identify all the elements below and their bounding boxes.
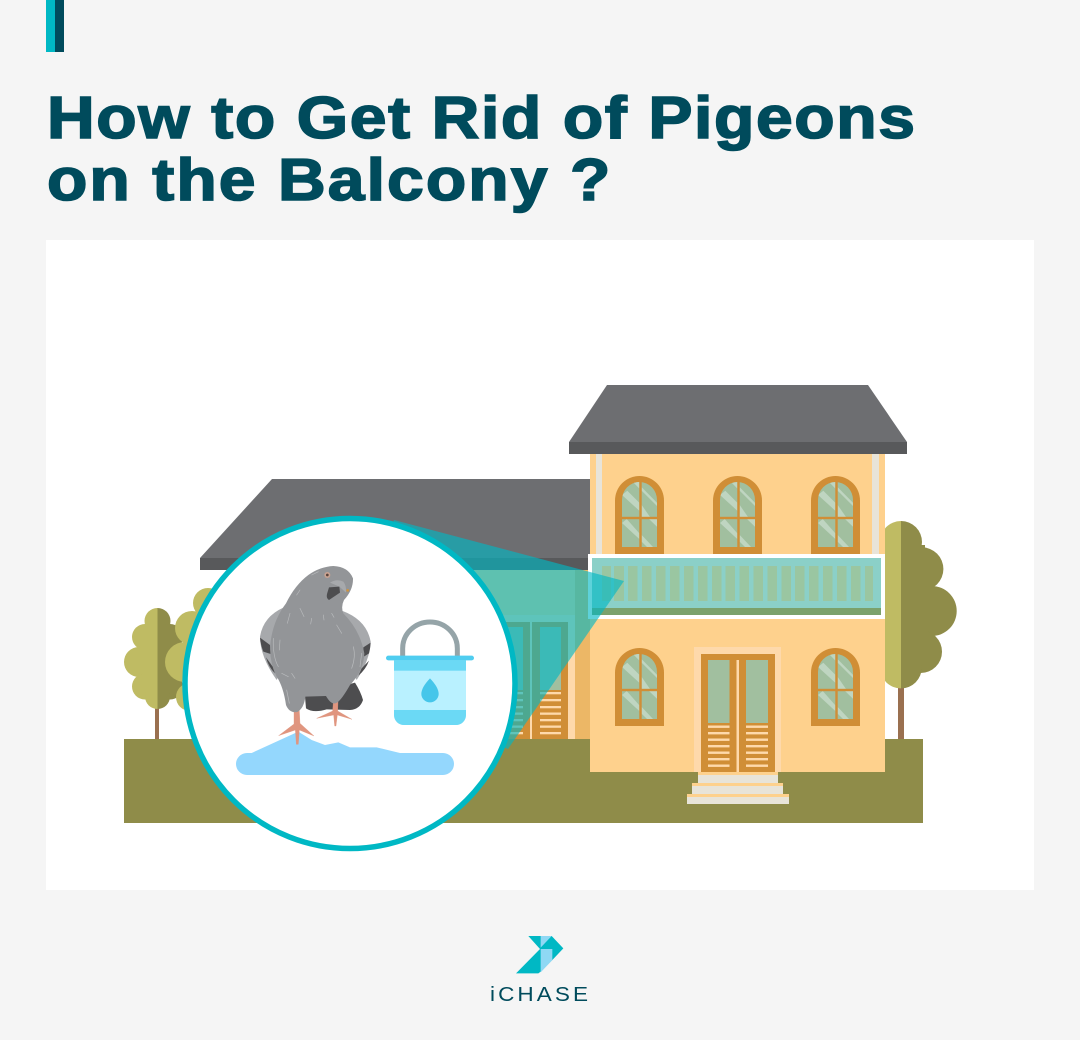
lower windows [615, 648, 860, 726]
pigeon [260, 566, 371, 744]
upper windows [615, 476, 860, 554]
magnified detail [236, 566, 474, 775]
ground [124, 739, 923, 823]
balcony highlighted [590, 556, 883, 617]
accent bar [46, 0, 64, 52]
tree: far left [124, 608, 182, 739]
magnifier beam [350, 520, 624, 749]
pigeon body [270, 566, 364, 712]
logo [490, 936, 591, 1006]
pigeon tail [305, 683, 363, 711]
main roof [569, 385, 907, 454]
pillars [596, 454, 879, 554]
bucket rim [386, 656, 474, 660]
bucket handle [403, 622, 457, 657]
pigeon legs and feet [279, 702, 352, 744]
magnifier circle [185, 518, 515, 848]
logo wordmark: iCHASE [490, 983, 591, 1006]
pigeon beak [327, 580, 346, 600]
panel: illustration background [46, 240, 1034, 890]
water drop [421, 678, 439, 702]
tree: behind the circle [165, 588, 230, 711]
puddle of water [236, 732, 454, 775]
front steps [687, 772, 789, 804]
bucket [386, 622, 474, 725]
pigeon eyes [324, 572, 349, 592]
logo mark [516, 936, 563, 973]
main building wall [590, 454, 885, 772]
front door [694, 647, 781, 772]
pigeon wings [260, 608, 371, 680]
title [47, 85, 915, 213]
title: How to Get Rid of Pigeons [47, 85, 915, 151]
illustration: house scene [124, 385, 957, 823]
title: on the Balcony ? [47, 147, 610, 213]
pigeon feather marks [273, 572, 362, 703]
left wing of house [200, 479, 590, 739]
bucket body [394, 660, 466, 725]
tree: right [880, 521, 957, 740]
